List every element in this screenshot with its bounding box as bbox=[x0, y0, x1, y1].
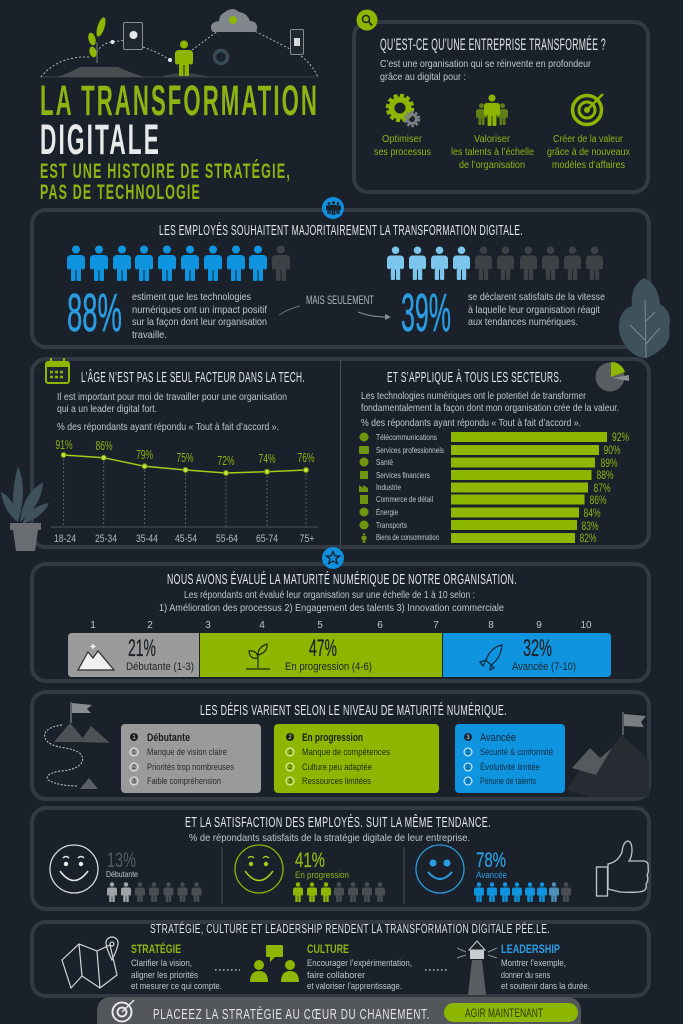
age heading: L’ÂGE N’EST PAS LE SEUL FACTEUR DANS LA TECH. bbox=[81, 369, 305, 386]
pillar: culture: faire collaborer bbox=[307, 970, 365, 981]
icon: calendar bbox=[46, 358, 69, 383]
line chart: age: 45-54 bbox=[175, 533, 197, 545]
text: 88% explanation: estiment que les technologies bbox=[132, 291, 251, 303]
card: en progression: 3 bbox=[288, 779, 292, 785]
scale numbers: 1 bbox=[90, 620, 96, 631]
segment: en progression: En progression (4-6) bbox=[285, 661, 372, 673]
scale numbers: 7 bbox=[433, 620, 439, 631]
bar chart: sectors: Télécommunications bbox=[376, 432, 437, 442]
panel: strategy culture leadership bbox=[32, 921, 649, 996]
card: avancée: Avancée bbox=[480, 732, 516, 744]
group: en progression satisfaction: 41% bbox=[295, 849, 325, 872]
card: débutante: Faible compréhension bbox=[147, 776, 221, 787]
maturity text: Les répondants ont évalué leur organisation sur une échelle de 1 à 10 selon : bbox=[184, 590, 475, 601]
bar chart: sectors bbox=[359, 430, 629, 545]
group: débutante satisfaction: 13% bbox=[107, 849, 136, 872]
stat: 88%: 88% bbox=[67, 283, 122, 343]
maturity text: 1) Amélioration des processus 2) Engagement des talents 3) Innovation commerciale bbox=[159, 603, 504, 614]
sectors text: Les technologies numériques ont le potentiel de transformer bbox=[361, 390, 586, 402]
panel: employees: 39% bbox=[401, 283, 451, 343]
text: 88% explanation: travaille. bbox=[132, 329, 167, 341]
call to action bar bbox=[97, 997, 581, 1024]
card: avancée: Sécurité & conformité bbox=[480, 747, 553, 758]
panel: maturity bbox=[32, 547, 649, 681]
pillar: leadership: Montrer l’exemple, bbox=[501, 958, 566, 969]
title: EST UNE HISTOIRE DE STRATÉGIE, bbox=[40, 160, 291, 183]
age text: % des répondants ayant répondu « Tout à fait d’accord ». bbox=[57, 421, 279, 433]
icon: target bbox=[112, 1000, 134, 1022]
pillar: stratégie: et mesurer ce qui compte. bbox=[131, 981, 222, 992]
text: 39% explanation: se déclarent satisfaits de la vitesse bbox=[468, 291, 605, 303]
decorative leaf bbox=[619, 278, 670, 358]
segment: avancée: Avancée (7-10) bbox=[512, 661, 576, 673]
pillar: stratégie: STRATÉGIE bbox=[131, 941, 181, 956]
bar chart: sectors: 88% bbox=[596, 468, 614, 482]
card: avancée bbox=[455, 724, 565, 793]
pillar: stratégie bbox=[62, 937, 222, 992]
sectors text: % des répondants ayant répondu « Tout à fait d’accord ». bbox=[361, 417, 581, 429]
card: débutante: 2 bbox=[132, 765, 136, 771]
sectors text: fondamentalement la façon dont mon organisation crée de la valeur. bbox=[361, 402, 619, 414]
icon: pie bbox=[596, 362, 629, 392]
pillar: culture: Encourager l’expérimentation, bbox=[307, 958, 412, 969]
pillar: stratégie: Clarifier la vision, bbox=[131, 958, 192, 969]
maturity text bbox=[159, 590, 504, 614]
panel: challenges bbox=[32, 692, 649, 799]
button: AGIR MAINTENANT bbox=[465, 1006, 543, 1020]
card: avancée: Évolutivité limitée bbox=[480, 762, 540, 773]
card: en progression bbox=[274, 724, 439, 793]
bar chart: sectors: 92% bbox=[612, 430, 629, 444]
segment: en progression: 47% bbox=[309, 635, 337, 662]
icon: target bbox=[572, 94, 603, 124]
line chart: age: 74% bbox=[258, 451, 276, 466]
line chart: age: 65-74 bbox=[256, 533, 278, 545]
card: avancée: 2 bbox=[466, 765, 470, 771]
label: optimiser: ses processus bbox=[374, 146, 431, 158]
line chart: age: 55-64 bbox=[216, 533, 238, 545]
icon: lighthouse bbox=[457, 941, 497, 995]
panel: definition bbox=[354, 10, 648, 192]
card: débutante: 1 bbox=[132, 735, 136, 741]
group: débutante satisfaction bbox=[50, 845, 202, 902]
line chart: age bbox=[51, 437, 318, 545]
illustration: mountain path bbox=[45, 702, 110, 789]
label: optimiser: Optimiser bbox=[382, 133, 422, 145]
icon: people badge bbox=[322, 197, 344, 219]
panel: age and sectors bbox=[32, 358, 649, 547]
group: débutante satisfaction: Débutante bbox=[106, 869, 138, 879]
divider bbox=[340, 360, 342, 545]
card: en progression: En progression bbox=[302, 732, 363, 744]
label: valoriser: Valoriser bbox=[474, 133, 510, 145]
line chart: age: 75+ bbox=[300, 533, 314, 545]
bar chart: sectors: 84% bbox=[584, 506, 601, 520]
sector icons bbox=[359, 432, 369, 543]
dividers bbox=[222, 847, 404, 904]
label: valoriser bbox=[451, 133, 534, 171]
scale numbers: 10 bbox=[580, 620, 592, 631]
text: 39% explanation: à laquelle leur organisation réagit bbox=[468, 304, 600, 316]
pillar: leadership bbox=[457, 941, 590, 995]
scale numbers: 5 bbox=[317, 620, 323, 631]
call to action text: PLACEEZ LA STRATÉGIE AU CŒUR DU CHANEMENT. bbox=[153, 1006, 430, 1023]
pillar: stratégie: aligner les priorités bbox=[131, 970, 198, 981]
title bbox=[40, 77, 319, 204]
bar chart: sectors: Services professionnels bbox=[376, 445, 444, 455]
bar chart: sectors: Industrie bbox=[376, 482, 401, 492]
card: en progression: Ressources limitées bbox=[302, 776, 371, 787]
title: DIGITALE bbox=[40, 116, 161, 164]
card: débutante: Manque de vision claire bbox=[147, 747, 227, 758]
label: créer: modèles d’affaires bbox=[552, 159, 625, 171]
title: LA TRANSFORMATION bbox=[40, 77, 319, 125]
satisfaction subtext: % de répondants satisfaits de la stratégie digitale de leur entreprise. bbox=[189, 832, 470, 844]
line chart: age: 25-34 bbox=[95, 533, 117, 545]
group: en progression satisfaction: En progression bbox=[295, 870, 349, 880]
line chart: age: 18-24 bbox=[54, 533, 76, 545]
bar chart: sectors: 86% bbox=[590, 493, 607, 507]
connector: mais seulement: MAIS SEULEMENT bbox=[306, 293, 374, 307]
age text: Il est important pour moi de travailler pour une organisation bbox=[57, 391, 287, 403]
card: débutante: Débutante bbox=[147, 732, 190, 744]
bar chart: sectors: Services financiers bbox=[376, 470, 430, 480]
segment: avancée bbox=[443, 633, 611, 677]
segment: débutante bbox=[68, 633, 199, 677]
hero illustration: digital landscape bbox=[40, 9, 319, 77]
people row: 88% bbox=[67, 246, 290, 281]
card: en progression: 2 bbox=[288, 765, 292, 771]
segment: débutante: Débutante (1-3) bbox=[126, 661, 194, 673]
card: avancée: 3 bbox=[466, 735, 470, 741]
card: en progression: 1 bbox=[288, 750, 292, 756]
sectors text bbox=[361, 390, 619, 429]
segment: en progression bbox=[200, 633, 442, 677]
icon: thumbs up bbox=[596, 841, 648, 896]
text: 88% explanation: sur la façon dont leur organisation bbox=[132, 316, 267, 328]
label: valoriser: de l’organisation bbox=[459, 159, 525, 171]
scale numbers bbox=[90, 620, 592, 631]
pillar: culture: et valoriser l’apprentissage. bbox=[307, 981, 402, 992]
text: 39% explanation: aux tendances numériques. bbox=[468, 316, 578, 328]
card: débutante: Priorités trop nombreuses bbox=[147, 762, 234, 773]
pillar: culture bbox=[250, 942, 412, 992]
card: en progression: 2 bbox=[288, 735, 292, 741]
illustration: summit flag bbox=[566, 712, 649, 797]
icon: team chat bbox=[250, 945, 299, 982]
scale numbers: 6 bbox=[377, 620, 383, 631]
panel: employees bbox=[32, 197, 649, 347]
button bbox=[444, 1003, 578, 1022]
bar chart: sectors: 90% bbox=[604, 443, 621, 457]
group: en progression satisfaction bbox=[235, 845, 385, 902]
definition text bbox=[380, 58, 591, 83]
icon: gears bbox=[388, 96, 419, 126]
card: avancée: Pénurie de talents bbox=[480, 776, 536, 787]
icon: map bbox=[62, 937, 118, 988]
bar chart: sectors: 83% bbox=[582, 519, 599, 533]
bar chart: sectors: 89% bbox=[600, 456, 618, 470]
line chart: age: 72% bbox=[218, 453, 235, 468]
group: avancée satisfaction bbox=[416, 845, 571, 902]
label: optimiser bbox=[374, 133, 431, 158]
bar chart: sectors: 82% bbox=[580, 531, 597, 545]
scale numbers: 3 bbox=[205, 620, 211, 631]
pillar: culture: CULTURE bbox=[307, 942, 349, 956]
bar chart: sectors: Santé bbox=[376, 457, 393, 467]
line chart: age: 76% bbox=[298, 450, 315, 465]
satisfaction heading: ET LA SATISFACTION DES EMPLOYÉS. SUIT LA MÊME TENDANCE. bbox=[185, 814, 491, 831]
line chart: age: 35-44 bbox=[136, 533, 158, 545]
label: créer bbox=[547, 133, 631, 171]
people row: 39% bbox=[387, 246, 603, 280]
group: avancée satisfaction: Avancée bbox=[476, 870, 507, 880]
card: débutante: 1 bbox=[132, 750, 136, 756]
card: en progression: Manque de compétences bbox=[302, 747, 390, 758]
line chart: age: 79% bbox=[136, 447, 153, 462]
bar chart: sectors: Transports bbox=[376, 520, 407, 530]
text: 88% explanation: numériques ont un impact positif bbox=[132, 304, 267, 316]
label: créer: grâce à de nouveaux bbox=[547, 146, 631, 158]
line chart: age: 75% bbox=[176, 450, 194, 465]
scale numbers: 2 bbox=[147, 620, 153, 631]
label: créer: Créer de la valeur bbox=[553, 133, 623, 145]
pillar: leadership: donner du sens bbox=[501, 970, 550, 981]
card: avancée: 3 bbox=[466, 779, 470, 785]
label: valoriser: les talents à l’échelle bbox=[451, 146, 534, 158]
decorative plant bbox=[1, 466, 49, 551]
icon: magnifier badge bbox=[356, 10, 378, 30]
text: 39% explanation bbox=[468, 291, 605, 328]
pillar: leadership: LEADERSHIP bbox=[501, 942, 560, 956]
age text bbox=[57, 391, 287, 433]
segment: avancée: 32% bbox=[523, 635, 552, 662]
definition text: grâce au digital pour : bbox=[380, 71, 466, 83]
card: débutante: 3 bbox=[132, 779, 136, 785]
segment: débutante: 21% bbox=[128, 635, 156, 662]
scale numbers: 9 bbox=[536, 620, 542, 631]
card: avancée: 1 bbox=[466, 750, 470, 756]
icon: talents bbox=[476, 94, 508, 126]
bar chart: sectors: 87% bbox=[594, 481, 611, 495]
line chart: age: 91% bbox=[56, 437, 73, 452]
connector: mais seulement bbox=[279, 293, 391, 320]
definition text: C’est une organisation qui se réinvente en profondeur bbox=[380, 58, 591, 70]
icon: star badge bbox=[322, 547, 344, 569]
bar chart: sectors: Biens de consommation bbox=[376, 532, 439, 542]
text: 88% explanation bbox=[132, 291, 267, 341]
group: avancée satisfaction: 78% bbox=[476, 849, 506, 872]
bar chart: sectors: Énergie bbox=[376, 507, 398, 517]
scale numbers: 8 bbox=[488, 620, 494, 631]
panel: satisfaction bbox=[32, 808, 649, 909]
bar chart: sectors: Commerce de détail bbox=[376, 494, 433, 504]
pillar: leadership: et soutenir dans la durée. bbox=[501, 981, 590, 992]
title: PAS DE TECHNOLOGIE bbox=[40, 181, 201, 204]
card: en progression: Culture peu adaptée bbox=[302, 762, 372, 773]
age text: qui a un leader digital fort. bbox=[57, 403, 157, 415]
scale numbers: 4 bbox=[259, 620, 265, 631]
connector dots bbox=[215, 969, 240, 971]
connector dots bbox=[425, 969, 449, 971]
line chart: age: 86% bbox=[96, 438, 113, 453]
card: débutante bbox=[121, 724, 261, 793]
